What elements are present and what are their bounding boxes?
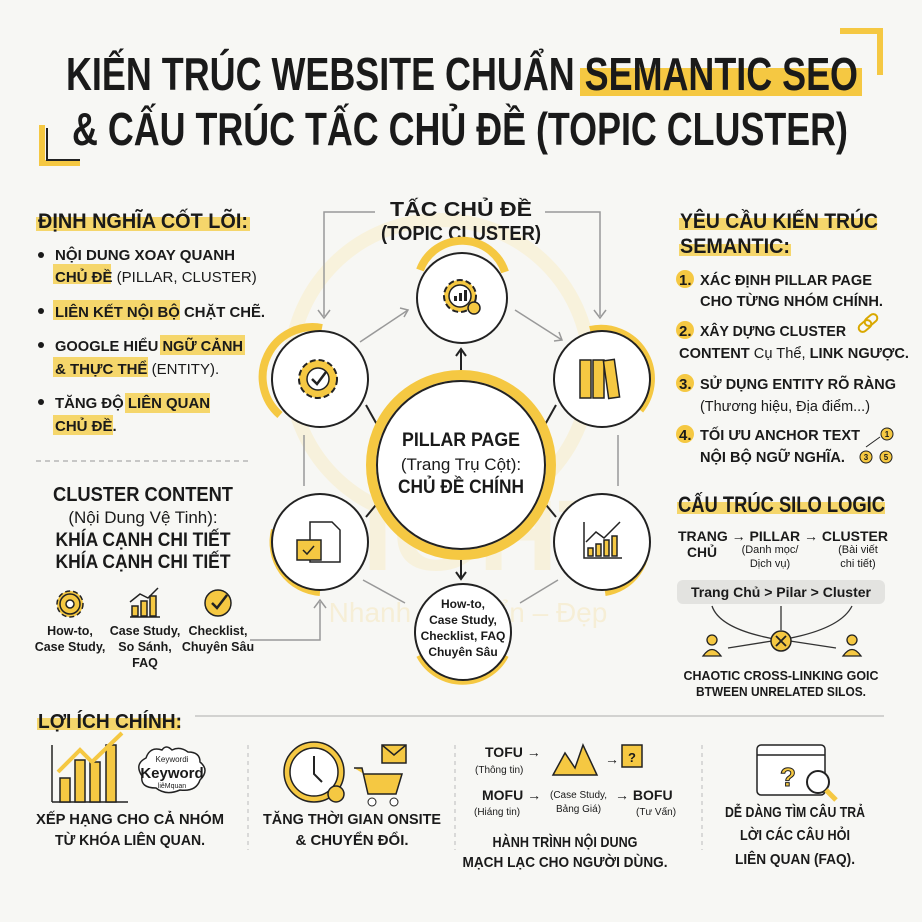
icon: check (205, 590, 231, 616)
panel: silo logic: chi tiết) (840, 558, 876, 570)
benefit 3: (Thông tin) (475, 765, 523, 776)
panel: cluster content: FAQ (132, 656, 158, 670)
icon: users (703, 635, 861, 656)
benefit 3: (Case Study, (550, 790, 607, 801)
benefit 3 (462, 744, 676, 871)
benefit 1: TỪ KHÓA LIÊN QUAN. (55, 831, 205, 849)
panel: silo logic: (Bài viết (838, 544, 878, 556)
panel: cluster content: (Nội Dung Vệ Tinh): (68, 508, 218, 527)
cluster node: bottom: Checklist, FAQ (421, 629, 505, 643)
panel: core definition: CHỦ ĐỀ (PILLAR, CLUSTER) (55, 268, 257, 286)
panel: cluster content: Case Study, (110, 624, 180, 638)
panel: silo logic: TRANG → PILLAR → CLUSTER (678, 528, 888, 544)
pillar page center: PILLAR PAGE (402, 430, 520, 451)
watermark (290, 220, 625, 628)
panel: silo logic: CẤU TRÚC SILO LOGIC (678, 492, 885, 517)
panel: semantic requirements: CONTENT Cụ Thể, LINK NGƯỢC. (679, 345, 909, 362)
pillar page center (371, 375, 551, 555)
benefit 3: ? (628, 750, 636, 765)
benefit 3: Bảng Giá) (556, 804, 601, 815)
pillar page center: CHỦ ĐỀ CHÍNH (398, 476, 524, 498)
panel: silo logic: Dịch vụ) (750, 558, 790, 570)
icon: anchor nodes: 1 (885, 430, 890, 439)
cluster node: top (417, 241, 507, 343)
icon: anchor nodes: 3 (864, 453, 869, 462)
panel: semantic requirements: NỘI BỘ NGỮ NGHĨA. (700, 448, 845, 466)
panel: cluster content: KHÍA CẠNH CHI TIẾT (56, 551, 231, 573)
panel: silo logic: Trang Chủ > Pilar > Cluster (691, 584, 872, 600)
panel: core definition: ĐỊNH NGHĨA CỐT LÕI: (38, 209, 248, 233)
panel: silo logic (677, 492, 888, 699)
watermark: Nhanh – Chuẩn – Đẹp (329, 597, 607, 628)
panel: semantic requirements: 4. (679, 427, 692, 444)
benefit 3: TOFU → (485, 744, 541, 760)
benefit 3: (Hiáng tin) (474, 807, 520, 818)
heading: topic cluster (381, 197, 541, 245)
panel: cluster content: Case Study, (35, 640, 105, 654)
icon: chart (130, 588, 160, 617)
benefit 1: liêMquan (158, 783, 186, 790)
icon: link (857, 312, 879, 334)
benefit 4: ? (780, 762, 796, 792)
cluster node: bottom (415, 584, 511, 681)
panel: semantic requirements (676, 209, 909, 466)
benefit 4: LỜI CÁC CÂU HỎI (740, 826, 850, 844)
icon: anchor nodes: 5 (884, 453, 889, 462)
arrows: topic connections (250, 212, 618, 640)
pillar page center: (Trang Trụ Cột): (401, 455, 521, 474)
benefit 1 (36, 733, 224, 849)
benefit 3: → (605, 751, 619, 767)
heading: benefits: LỢI ÍCH CHÍNH: (38, 710, 182, 733)
panel: core definition: NỘI DUNG XOAY QUANH (55, 246, 235, 264)
title (42, 31, 880, 163)
panel: core definition: TĂNG ĐỘ LIÊN QUAN (55, 394, 210, 412)
panel: semantic requirements: XÁC ĐỊNH PILLAR PAGE (700, 272, 872, 289)
cluster node: bottom: Chuyên Sâu (428, 645, 498, 659)
panel: core definition: GOOGLE HIỂU NGỮ CẢNH (55, 337, 243, 355)
panel: semantic requirements: CHO TỪNG NHÓM CHÍNH. (700, 292, 883, 310)
cluster node: lower-right (554, 494, 650, 592)
benefit 1: Keyword (140, 765, 204, 782)
panel: cluster content: Chuyên Sâu (182, 640, 254, 654)
panel: core definition (36, 209, 265, 435)
benefit 4 (725, 745, 865, 868)
icon: anchor nodes (860, 428, 893, 463)
panel: cluster content: Checklist, (188, 624, 248, 638)
cluster node: bottom: How-to, (441, 597, 485, 611)
panel: semantic requirements: SỬ DỤNG ENTITY RÕ RÀNG (700, 375, 896, 393)
panel: core definition: CHỦ ĐỀ. (55, 417, 117, 435)
panel: semantic requirements: YÊU CẦU KIẾN TRÚC (680, 209, 878, 233)
benefit 2 (263, 742, 441, 849)
watermark: LIGHT (295, 480, 625, 592)
panel: cluster content: So Sánh, (118, 640, 172, 654)
cluster node: upper-right (554, 329, 651, 427)
cluster node: lower-left (272, 494, 368, 592)
panel: semantic requirements: SEMANTIC: (680, 235, 790, 258)
benefit 2: TĂNG THỜI GIAN ONSITE (263, 810, 441, 828)
panel: cluster content: CLUSTER CONTENT (53, 484, 233, 506)
benefit 1: XẾP HẠNG CHO CẢ NHÓM (36, 810, 224, 828)
benefit 2: & CHUYỂN ĐỔI. (296, 831, 408, 849)
panel: semantic requirements: TỐI ƯU ANCHOR TEXT (700, 426, 860, 444)
benefit 3: HÀNH TRÌNH NỘI DUNG (492, 833, 638, 851)
panel: silo logic: (Danh mọc/ (742, 544, 799, 556)
cluster node: upper-left (263, 327, 368, 427)
benefit 4: DỄ DÀNG TÌM CÂU TRẢ (725, 803, 865, 821)
benefit 4: LIÊN QUAN (FAQ). (735, 850, 855, 868)
heading: topic cluster: (TOPIC CLUSTER) (381, 223, 541, 245)
panel: semantic requirements: 2. (679, 323, 692, 340)
panel: semantic requirements: 3. (679, 376, 692, 393)
benefit 3: MẠCH LẠC CHO NGƯỜI DÙNG. (462, 853, 668, 871)
panel: silo logic: CHỦ (687, 543, 717, 560)
panel: silo logic: CHAOTIC CROSS-LINKING GOIC (684, 668, 879, 683)
benefit 3: MOFU → (482, 787, 541, 803)
panel: core definition: & THỰC THỂ (ENTITY). (55, 360, 219, 378)
panel: semantic requirements: 1. (679, 272, 692, 289)
panel: semantic requirements: (Thương hiệu, Địa điểm...) (700, 398, 870, 415)
arrows: pillar to clusters (366, 349, 556, 579)
panel: core definition: LIÊN KẾT NỘI BỘ CHẶT CHẼ. (55, 303, 265, 321)
benefit 3: (Tư Vấn) (636, 806, 676, 818)
benefit 1: Keywordi (156, 755, 189, 764)
heading: topic cluster: TẤC CHỦ ĐỀ (390, 197, 532, 221)
benefit 3: → BOFU (615, 787, 673, 803)
cluster node: bottom: Case Study, (429, 613, 497, 627)
panel: cluster content: KHÍA CẠNH CHI TIẾT (56, 529, 231, 551)
panel: cluster content: How-to, (47, 624, 93, 638)
panel: silo logic: BTWEEN UNRELATED SILOS. (696, 684, 866, 699)
panel: cluster content (35, 484, 254, 670)
panel: semantic requirements: XÂY DỰNG CLUSTER (700, 322, 846, 340)
icon: gear (57, 591, 83, 617)
